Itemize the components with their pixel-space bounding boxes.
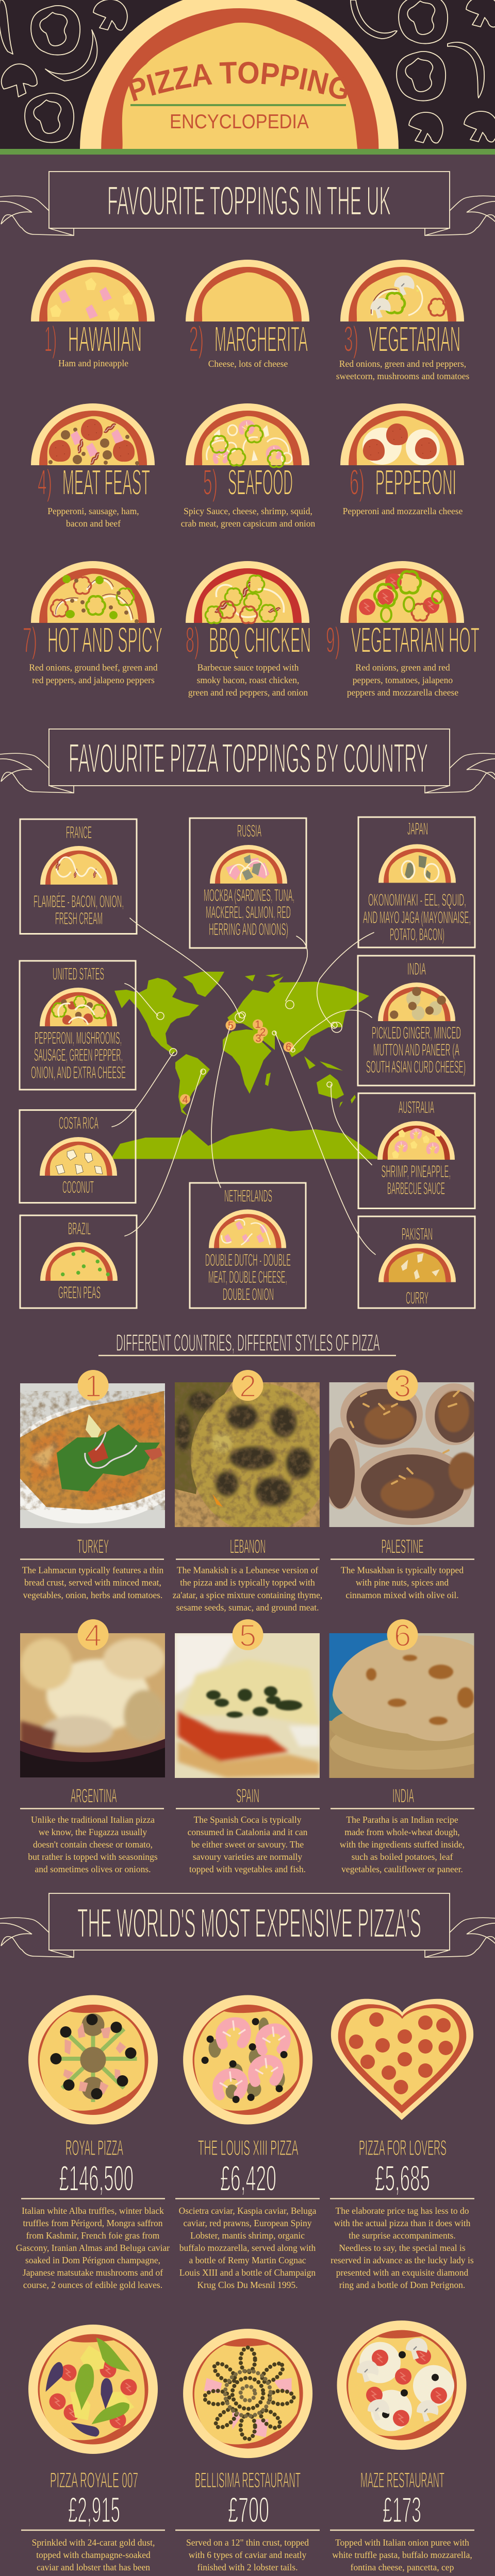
card: Spain xyxy=(175,1618,320,1874)
card: Pizza for Lovers xyxy=(330,1999,474,2290)
card: Pizza for Lovers: £5,685 xyxy=(375,2158,430,2198)
panel: India: INDIA xyxy=(407,959,426,978)
text: MEAT, DOUBLE CHEESE, xyxy=(208,1267,287,1286)
number badge 1 xyxy=(78,1369,109,1403)
card: Bellisima Restaurant: with 6 types of caviar and neatly xyxy=(189,2550,306,2560)
banner heading: the world's most expensive pizzas xyxy=(0,1893,495,1957)
card: Louis XIII: £6,420 xyxy=(220,2158,276,2198)
card: Royal Pizza: soaked in Dom Pérignon champagne, xyxy=(25,2255,160,2265)
pizza: India xyxy=(378,982,455,1021)
photo: Manakish xyxy=(175,1382,320,1527)
card: Argentina: we know, the Fugazza usually xyxy=(39,1827,147,1837)
pizza: Brazil xyxy=(40,1242,118,1281)
card: Vegetarian Hot: 9) xyxy=(326,620,340,660)
panel: United States xyxy=(20,961,136,1090)
card: Louis XIII: THE LOUIS XIII PIZZA xyxy=(198,2136,298,2160)
text: BBQ CHICKEN xyxy=(209,620,311,660)
panel: Pakistan: PAKISTAN xyxy=(402,1224,433,1244)
card: Argentina: Unlike the traditional Italian pizza xyxy=(31,1815,155,1825)
panel: Russia xyxy=(190,818,306,948)
panel: Pakistan xyxy=(358,1216,475,1308)
card: Louis XIII xyxy=(175,1995,320,2290)
number badge 5 xyxy=(233,1618,263,1653)
panel: Costa Rica: COCONUT xyxy=(62,1178,94,1196)
map location numbers: 5 xyxy=(228,1020,234,1031)
card: Pepperoni xyxy=(340,403,464,516)
card: Maze Restaurant: white truffle pasta, buffalo mozzarella, xyxy=(332,2550,472,2560)
card: India: with the ingredients stuffed inside, xyxy=(340,1839,465,1850)
card: India xyxy=(329,1619,474,1874)
text: BELLISIMA RESTAURANT xyxy=(195,2468,301,2492)
banner heading: favourite toppings in the UK xyxy=(0,172,495,235)
card: Royal Pizza: Gascony, Iranian Almas and Beluga caviar xyxy=(16,2243,170,2253)
panel: France: FRESH CREAM xyxy=(55,909,103,928)
card: Bellisima Restaurant: £700 xyxy=(228,2489,269,2530)
card: Pepperoni: 6) xyxy=(350,462,365,502)
card: Meat Feast xyxy=(31,403,155,529)
photo: Musakhan xyxy=(329,1382,474,1527)
map location numbers: 4 xyxy=(182,1094,188,1106)
text: FLAMBÉE - BACON, ONION, xyxy=(34,892,124,911)
photo: Fugazza xyxy=(20,1633,165,1777)
number badge 3: 3 xyxy=(394,1369,411,1403)
card: Pepperoni: Pepperoni and mozzarella cheese xyxy=(343,506,463,516)
card: Maze Restaurant: fontina cheese, pancetta, cep xyxy=(351,2562,454,2572)
panel: France xyxy=(20,819,137,934)
card: Palestine: cinnamon mixed with olive oil. xyxy=(345,1590,459,1600)
card: Pizza Royale 007 xyxy=(21,2325,165,2576)
pizza: Vegetarian xyxy=(340,260,464,321)
pizza: Royale 007 xyxy=(28,2325,158,2454)
card: Royal Pizza xyxy=(16,1995,170,2290)
number badge 3 xyxy=(387,1369,418,1403)
card: BBQ Chicken xyxy=(186,561,311,698)
pizza: Meat Feast xyxy=(31,403,155,465)
card: Pizza Royale 007: £2,915 xyxy=(68,2489,120,2530)
panel: Netherlands: NETHERLANDS xyxy=(224,1186,272,1206)
card: Louis XIII: caviar, red prawns, European Spiny xyxy=(183,2218,312,2228)
card: BBQ Chicken: smoky bacon, roast chicken, xyxy=(197,675,299,685)
panel: Japan xyxy=(358,817,475,947)
card: Royal Pizza: truffles from Périgord, Mongra saffron xyxy=(23,2218,163,2228)
panel: India xyxy=(358,956,474,1086)
card: Spain: The Spanish Coca is typically xyxy=(194,1815,302,1825)
card: Turkey: bread crust, served with minced meat, xyxy=(24,1578,161,1588)
card: Spain: SPAIN xyxy=(236,1786,259,1807)
pizza: Maze xyxy=(337,2320,466,2450)
pizza: Pakistan xyxy=(378,1244,456,1282)
number badge 1: 1 xyxy=(85,1369,102,1403)
text: SEAFOOD xyxy=(228,462,293,502)
card: Lebanon: The Manakish is a Lebanese version of xyxy=(177,1565,318,1575)
photo: Lahmacun xyxy=(20,1383,165,1528)
card: Spain: topped with vegetables and fish. xyxy=(189,1864,306,1874)
panel: Brazil: BRAZIL xyxy=(68,1219,91,1238)
pizza: Pepperoni xyxy=(340,403,464,465)
title rule xyxy=(130,104,346,106)
card: BBQ Chicken: 8) xyxy=(186,620,200,660)
pizza: Seafood xyxy=(186,403,309,467)
pizza: Hawaiian xyxy=(31,260,155,321)
card: Argentina: but rather is topped with seasonings xyxy=(28,1852,158,1862)
card: Spain: be either sweet or savoury. The xyxy=(191,1839,304,1850)
card: Hot and Spicy: Red onions, ground beef, green and xyxy=(29,663,158,673)
card: Margherita: 2) xyxy=(189,319,204,359)
card: Royal Pizza: Japanese matsutake mushrooms and of xyxy=(23,2267,163,2278)
card: Hawaiian: Ham and pineapple xyxy=(58,358,128,368)
card: Turkey xyxy=(20,1370,165,1600)
card: Palestine xyxy=(329,1370,474,1598)
card: Seafood: 5) xyxy=(203,462,218,502)
card: Bellisima Restaurant xyxy=(175,2329,320,2572)
card: Hot and Spicy: red peppers, and jalapeno peppers xyxy=(32,675,155,685)
pizza: Margherita xyxy=(186,260,309,321)
card: Bellisima Restaurant: Served on a 12" thin crust, topped xyxy=(186,2537,309,2548)
text: MACKEREL, SALMON, RED xyxy=(206,903,291,922)
card: Margherita: Cheese, lots of cheese xyxy=(208,359,288,369)
photo: Coca xyxy=(175,1633,320,1778)
card: Vegetarian: sweetcorn, mushrooms and tomatoes xyxy=(336,371,469,381)
card: Pizza for Lovers: presented with an exquisite diamond xyxy=(336,2267,469,2278)
banner heading: favourite pizza toppings by country xyxy=(0,729,495,793)
card: Argentina xyxy=(20,1618,165,1874)
map location numbers: 2 xyxy=(260,1027,266,1038)
pizza: BBQ Chicken xyxy=(186,561,309,623)
card: Lebanon: sesame seeds, sumac, and ground meat. xyxy=(176,1602,319,1613)
card: Bellisima Restaurant: finished with 2 lobster tails. xyxy=(197,2562,298,2572)
card: Palestine: The Musakhan is typically topped xyxy=(341,1565,464,1575)
panel: Japan: JAPAN xyxy=(407,819,428,838)
card: Argentina: ARGENTINA xyxy=(71,1786,117,1807)
text: HAWAIIAN xyxy=(68,319,142,359)
card: Pizza Royale 007: PIZZA ROYALE 007 xyxy=(50,2468,138,2492)
panel: Netherlands: DOUBLE ONION xyxy=(223,1285,274,1303)
card: Pizza for Lovers: ring and a bottle of Dom Perignon. xyxy=(339,2280,465,2290)
card: India: such as boiled potatoes, leaf xyxy=(352,1852,453,1862)
pizza: Vegetarian Hot xyxy=(340,561,464,623)
card: Royal Pizza: ROYAL PIZZA xyxy=(65,2136,123,2160)
card: Pizza for Lovers: Needless to say, the special meal is xyxy=(339,2243,466,2253)
panel: Pakistan: CURRY xyxy=(406,1289,428,1308)
number badge 6: 6 xyxy=(394,1618,411,1653)
card: Lebanon: za'atar, a spice mixture containing thyme, xyxy=(173,1590,322,1600)
number badge 5: 5 xyxy=(239,1618,256,1653)
card: Lebanon xyxy=(173,1369,330,1613)
panel: Brazil xyxy=(20,1215,137,1308)
panel: Netherlands xyxy=(190,1183,306,1308)
pizza: Japan xyxy=(378,844,456,883)
card: Pizza for Lovers: The elaborate price tag has less to do xyxy=(335,2206,469,2216)
map location numbers: 1 xyxy=(255,1019,261,1030)
card: India: INDIA xyxy=(392,1786,414,1807)
card: Maze Restaurant xyxy=(330,2320,474,2576)
card: Royal Pizza: £146,500 xyxy=(59,2158,134,2198)
pizza: Bellisima xyxy=(183,2329,312,2458)
number badge 4 xyxy=(78,1618,109,1653)
text: HERRING AND ONIONS) xyxy=(209,920,288,939)
card: Louis XIII: a bottle of Remy Martin Cognac xyxy=(189,2255,306,2265)
card: Pizza for Lovers: reserved in advance as the lucky lady is xyxy=(331,2255,474,2265)
number badge 2 xyxy=(233,1369,263,1403)
pizza: Costa Rica xyxy=(40,1137,117,1176)
card: Meat Feast: bacon and beef xyxy=(66,518,121,529)
card: Seafood xyxy=(181,403,315,529)
card: BBQ Chicken: Barbecue sauce topped with xyxy=(197,663,299,673)
card: Maze Restaurant: £173 xyxy=(383,2489,421,2530)
pizza: France xyxy=(40,846,118,885)
card: Pizza Royale 007: caviar and lobster that has been xyxy=(37,2562,150,2572)
text: DOUBLE DUTCH - DOUBLE xyxy=(205,1250,291,1269)
photo: Paratha xyxy=(329,1633,474,1778)
pizza: Netherlands xyxy=(209,1210,286,1248)
card: Seafood: Spicy Sauce, cheese, shrimp, squid, xyxy=(184,506,312,516)
panel: Brazil: GREEN PEAS xyxy=(58,1283,101,1302)
card: Lebanon: the pizza and is typically topped with xyxy=(180,1578,315,1588)
card: Meat Feast: Pepperoni, sausage, ham, xyxy=(47,506,139,516)
card: Spain: consumed in Catalonia and it can xyxy=(188,1827,308,1837)
text: MARGHERITA xyxy=(214,319,308,359)
map location numbers: 6 xyxy=(286,1042,291,1053)
panel: Australia xyxy=(358,1093,475,1209)
card: Pizza Royale 007: topped with champagne-soaked xyxy=(36,2550,151,2560)
card: Royal Pizza: Italian white Alba truffles, winter black xyxy=(22,2206,164,2216)
text: HOT AND SPICY xyxy=(47,620,162,660)
card: Hot and Spicy: 7) xyxy=(23,620,37,660)
card: Hot and Spicy xyxy=(23,561,162,685)
card: Louis XIII: Oscietra caviar, Kaspia caviar, Beluga xyxy=(179,2206,317,2216)
card: Royal Pizza: from Kashmir, French foie gras from xyxy=(26,2230,160,2241)
panel: Costa Rica xyxy=(20,1110,136,1203)
map location numbers: 3 xyxy=(255,1033,261,1044)
card: Margherita xyxy=(186,260,309,369)
card: Maze Restaurant: Topped with Italian onion puree with xyxy=(335,2537,469,2548)
card: Vegetarian Hot xyxy=(326,561,480,698)
card: Spain: savoury varieties are normally xyxy=(193,1852,302,1862)
card: Meat Feast: 4) xyxy=(38,462,52,502)
card: India: made from whole-wheat dough, xyxy=(344,1827,460,1837)
panel: Russia: RUSSIA xyxy=(237,821,261,840)
text: SAUSAGE, GREEN PEPPER, xyxy=(34,1045,123,1064)
panel: United States: UNITED STATES xyxy=(53,964,104,983)
card: Vegetarian Hot: peppers, tomatoes, jalapeno xyxy=(353,675,453,685)
card: Lebanon: LEBANON xyxy=(230,1536,266,1558)
pizza: Hot and Spicy xyxy=(31,561,155,623)
text: PEPPERONI, MUSHROOMS, xyxy=(35,1028,122,1047)
card: India: vegetables, cauliflower or paneer. xyxy=(341,1864,463,1874)
card: India: The Paratha is an Indian recipe xyxy=(346,1815,458,1825)
card: Pizza for Lovers: the surprise accompaniments. xyxy=(349,2230,456,2241)
panel: Australia: AUSTRALIA xyxy=(399,1097,434,1117)
card: Turkey: TURKEY xyxy=(77,1536,109,1558)
card: Louis XIII: Krug Clos Du Mesnil 1995. xyxy=(197,2280,298,2290)
card: Vegetarian xyxy=(336,260,469,381)
pizza: Louis XIII xyxy=(183,1995,312,2125)
panel: Costa Rica: COSTA RICA xyxy=(59,1113,98,1132)
card: Louis XIII: Lobster, mantis shrimp, organic xyxy=(190,2230,305,2241)
card: Vegetarian Hot: Red onions, green and red xyxy=(355,663,450,673)
text: MEAT FEAST xyxy=(62,462,150,502)
world map xyxy=(112,972,377,1159)
number badge 4: 4 xyxy=(85,1618,102,1653)
card: Louis XIII: Louis XIII and a bottle of Champaign xyxy=(179,2267,316,2278)
pizza: Australia xyxy=(377,1121,455,1160)
card: Vegetarian Hot: peppers and mozzarella cheese xyxy=(347,687,458,698)
number badge 2: 2 xyxy=(239,1369,256,1403)
pizza: heart xyxy=(331,1999,473,2120)
header doodles: peppers, mushrooms, onions xyxy=(0,0,495,143)
card: Palestine: PALESTINE xyxy=(382,1536,424,1558)
card: Turkey: vegetables, onion, herbs and tomatoes. xyxy=(23,1590,162,1600)
connector lines from country panels to map xyxy=(112,918,375,1255)
card: BBQ Chicken: green and red peppers, and onion xyxy=(188,687,308,698)
card: Hawaiian: 1) xyxy=(44,319,57,359)
card: Pizza Royale 007: Sprinkled with 24-carat gold dust, xyxy=(32,2537,155,2548)
card: Royal Pizza: course, 2 ounces of edible gold leaves. xyxy=(23,2280,162,2290)
number badge 6 xyxy=(387,1618,418,1653)
pizza: Royal xyxy=(28,1995,158,2125)
pizza: Russia xyxy=(210,845,287,884)
card: Louis XIII: buffalo mozzarella, served along with xyxy=(179,2243,316,2253)
card: Seafood: crab meat, green capsicum and onion xyxy=(181,518,315,529)
header panel xyxy=(0,0,495,155)
card: Turkey: The Lahmacun typically features a thin xyxy=(22,1565,164,1575)
header pizza xyxy=(80,0,399,149)
text: ONION, AND EXTRA CHEESE xyxy=(31,1063,126,1082)
map location numbers xyxy=(180,1019,294,1106)
card: Palestine: with pine nuts, spices and xyxy=(356,1578,449,1588)
subtitle: encyclopedia: ENCYCLOPEDIA xyxy=(170,111,309,133)
pizza: United States xyxy=(40,988,117,1026)
card: Vegetarian: 3) xyxy=(344,319,358,359)
card: Vegetarian: Red onions, green and red peppers, xyxy=(339,359,466,369)
card: Pizza for Lovers: with the actual pizza than it does with xyxy=(334,2218,471,2228)
card: Hawaiian xyxy=(31,260,155,368)
card: Argentina: and sometimes olives or onions. xyxy=(35,1864,151,1874)
panel: France: FRANCE xyxy=(66,823,92,842)
text: MOCKBA (SARDINES, TUNA, xyxy=(204,886,294,905)
title: pizza topping: PIZZA TOPPING xyxy=(129,62,348,101)
card: Argentina: doesn't contain cheese or tomato, xyxy=(33,1839,153,1850)
